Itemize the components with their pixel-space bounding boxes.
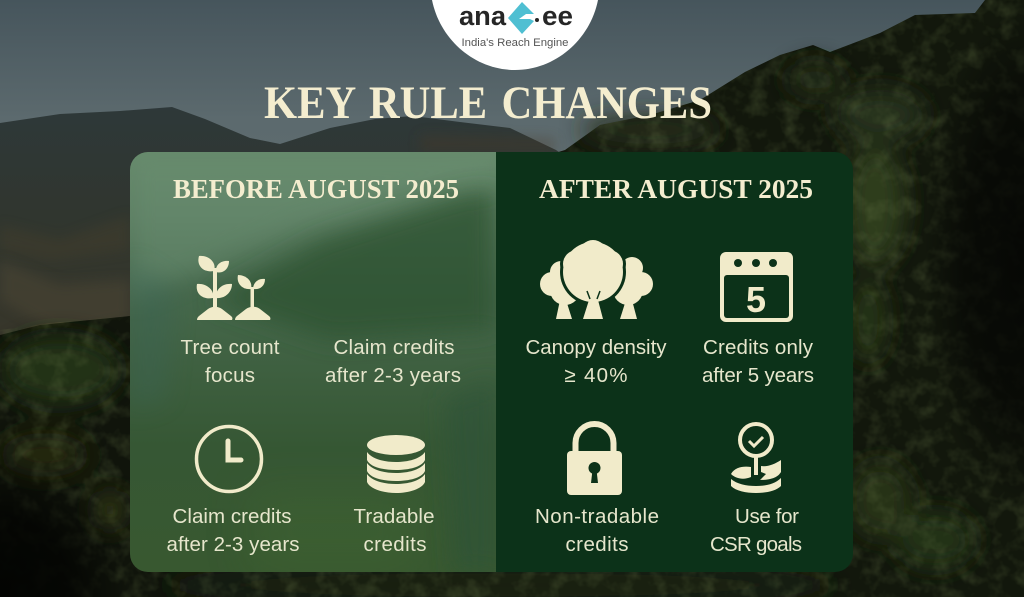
label: canopy density: Canopy density bbox=[526, 336, 667, 359]
icon: seedlings bbox=[197, 256, 270, 320]
label: non-tradable credits: Non-tradable bbox=[535, 505, 659, 528]
logo wordmark bbox=[459, 1, 573, 49]
label: claim credits after 2-3 years: after 2-3 years bbox=[166, 533, 300, 556]
logo badge bbox=[432, 0, 598, 70]
icon: three trees bbox=[540, 237, 653, 319]
label: tradable credits: credits bbox=[364, 533, 426, 556]
logo wordmark: India's Reach Engine bbox=[462, 37, 568, 49]
label: claim credits after 2-3 years: after 2-3 years bbox=[325, 364, 461, 387]
icon: clock bbox=[196, 426, 262, 492]
label: claim credits after 2-3 years: Claim credits bbox=[172, 505, 292, 528]
label: tree count focus: Tree count bbox=[180, 336, 280, 359]
label: credits only after 5 years: Credits only bbox=[703, 336, 814, 359]
logo wordmark: ee bbox=[542, 1, 573, 31]
icon: coin stack bbox=[367, 435, 425, 493]
heading: after: AFTER AUGUST 2025 bbox=[539, 174, 813, 204]
label: tree count focus: focus bbox=[205, 364, 255, 387]
label: canopy density: ≥ 40% bbox=[564, 364, 628, 387]
label: non-tradable credits: credits bbox=[566, 533, 628, 556]
panel: before August 2025 bbox=[130, 152, 496, 572]
right tree bbox=[613, 257, 653, 319]
icon: CSR goal pin bbox=[731, 424, 781, 493]
label: claim credits after 2-3 years: Claim credits bbox=[334, 336, 454, 359]
icon: padlock bbox=[567, 424, 622, 495]
icon: calendar with 5: 5 bbox=[746, 279, 766, 320]
label: tradable credits: Tradable bbox=[354, 505, 434, 528]
left tree bbox=[540, 261, 580, 319]
heading: before: BEFORE AUGUST 2025 bbox=[173, 174, 459, 204]
label: use for CSR goals: CSR goals bbox=[710, 533, 802, 556]
title: KEY RULE CHANGES bbox=[264, 77, 712, 129]
icon: calendar with 5 bbox=[720, 252, 793, 322]
panel: after August 2025 bbox=[496, 152, 853, 572]
label: credits only after 5 years: after 5 years bbox=[702, 364, 814, 387]
logo wordmark: ana bbox=[459, 1, 507, 31]
label: use for CSR goals: Use for bbox=[735, 505, 799, 528]
